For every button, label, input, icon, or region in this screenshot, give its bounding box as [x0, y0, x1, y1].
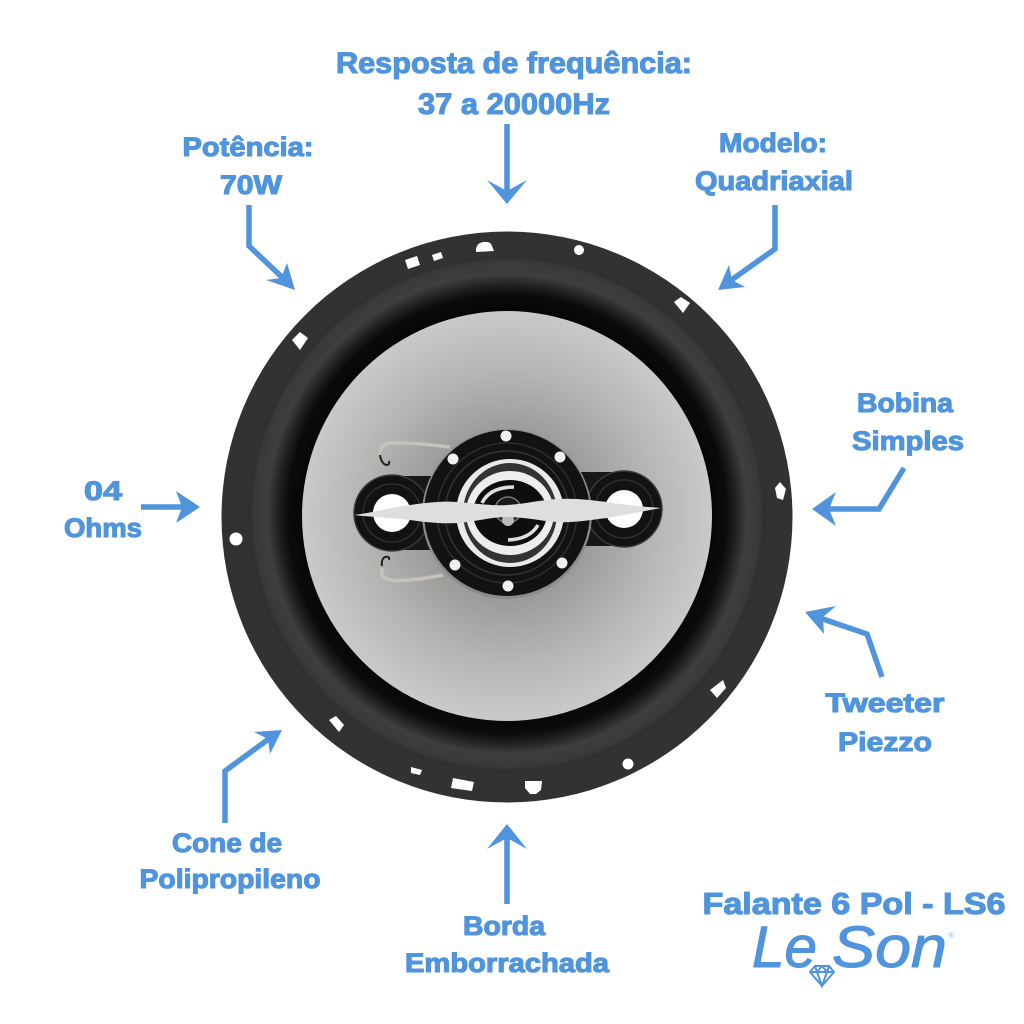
label: ohms: Ohms	[64, 513, 142, 543]
central hub	[422, 429, 592, 599]
label: coil: Bobina	[857, 388, 954, 418]
title: frequency response	[336, 47, 692, 121]
label: cone	[140, 828, 320, 894]
mounting holes	[230, 242, 786, 794]
label: cone: Polipropileno	[140, 864, 320, 894]
arrow: ohms	[141, 491, 200, 523]
arrow: frequency	[487, 124, 527, 204]
arrow: power	[249, 205, 295, 290]
label: coil	[852, 388, 964, 456]
label: power: Potência:	[182, 132, 314, 162]
silver bar	[354, 499, 661, 523]
hub screws	[448, 430, 568, 592]
title: frequency response: Resposta de frequência:	[336, 47, 692, 80]
label: tweeter	[826, 688, 945, 757]
wires	[380, 443, 450, 580]
gray cone	[302, 311, 712, 721]
tweeter housing left	[354, 475, 450, 551]
logo: Le Son: Son	[832, 915, 947, 980]
chrome dome	[456, 459, 564, 567]
label: power	[182, 132, 314, 200]
label: cone: Cone de	[172, 828, 282, 858]
speaker	[222, 232, 792, 802]
wire ends	[380, 455, 389, 566]
label: tweeter: Piezzo	[838, 727, 932, 757]
label: ohms	[64, 476, 142, 543]
icon: diamond	[810, 966, 834, 986]
product name: Falante 6 Pol - LS6	[702, 886, 1006, 921]
tweeter housing right	[570, 471, 662, 547]
speaker frame	[222, 232, 792, 802]
logo: Le Son: Le	[752, 915, 817, 980]
label: edge	[405, 911, 610, 978]
label: model: Modelo:	[719, 128, 827, 158]
arrow: model	[718, 205, 775, 290]
label: tweeter: Tweeter	[826, 688, 945, 718]
label: model: Quadriaxial	[695, 166, 853, 196]
arrow: tweeter	[805, 606, 882, 677]
title: frequency response: 37 a 20000Hz	[418, 88, 610, 121]
rubber surround	[249, 256, 765, 772]
label: coil: Simples	[852, 426, 964, 456]
arrow: cone	[225, 730, 282, 823]
label: edge: Borda	[463, 911, 546, 941]
arrow: coil	[812, 468, 904, 526]
label: edge: Emborrachada	[405, 948, 610, 978]
logo: Le Son: ®	[948, 931, 954, 940]
arrow: edge	[487, 824, 527, 904]
logo: Le Son	[752, 915, 954, 986]
label: model	[695, 128, 853, 196]
label: power: 70W	[220, 170, 283, 200]
label: ohms: 04	[84, 476, 122, 506]
